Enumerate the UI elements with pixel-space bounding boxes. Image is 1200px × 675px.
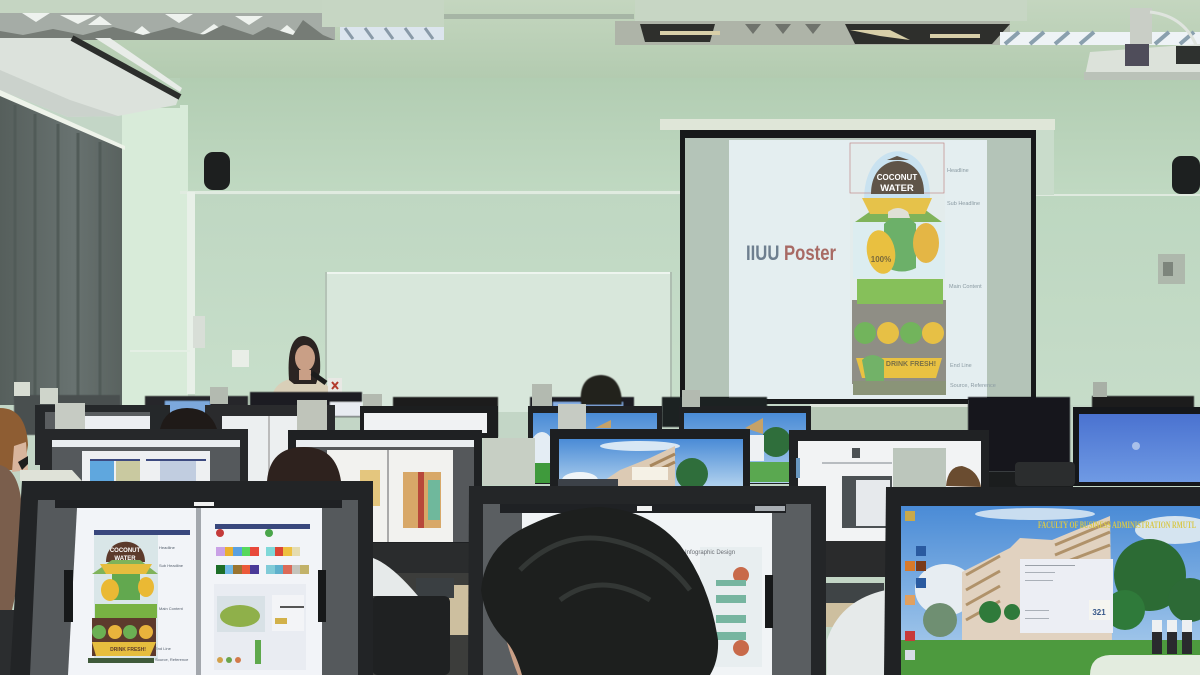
document left page: infographic: Source, Reference (155, 657, 189, 662)
text: document snippet: Infographic Design (685, 550, 735, 556)
poster example (850, 143, 946, 395)
whiteboard (325, 272, 672, 412)
monitor: row 3 left (40, 429, 248, 481)
slide labels: End Line (950, 363, 972, 369)
poster example: COCONUT (877, 173, 917, 182)
monitor: row 3 centre left (288, 430, 482, 558)
front left student hair (0, 465, 22, 675)
dark desks behind right monitors (989, 472, 1073, 490)
desktop wallpaper (901, 506, 1200, 675)
monitor: row 2 right (679, 406, 811, 484)
document left page: infographic: Main Content (159, 606, 184, 611)
grey paper stands (14, 382, 1107, 488)
poster example: 100% (871, 255, 891, 264)
slide title: IIUU Poster (746, 242, 836, 265)
document left page: infographic: WATER (114, 556, 136, 562)
document left page: infographic: Sub Headline (159, 563, 184, 568)
desktop icons (905, 511, 926, 660)
slide labels (947, 168, 996, 389)
projector (1084, 8, 1200, 80)
monitor: row 3 centre (550, 429, 750, 490)
monitor: row 2 far left (35, 405, 170, 465)
air conditioner (0, 38, 182, 117)
wall switch (193, 316, 249, 367)
front left monitor (10, 481, 373, 675)
seated student row 3 heads (20, 447, 981, 487)
front right monitor (884, 487, 1200, 675)
monitor: row 2 second (205, 405, 335, 481)
desk area (372, 541, 886, 675)
slide labels: Source, Reference (950, 383, 996, 389)
front student head (481, 507, 718, 675)
document right page: colour palettes (214, 524, 310, 670)
seated students row 2 heads (0, 408, 1075, 486)
monitor: row 3 right (789, 430, 989, 555)
poster example: WATER (880, 183, 914, 194)
monitor: row 2 centre (528, 406, 662, 484)
dialog window (1020, 559, 1113, 633)
front centre monitor (468, 486, 826, 675)
slide labels: Headline (947, 168, 969, 174)
screen ledge (680, 400, 968, 435)
projection screen (660, 119, 1055, 400)
dialog window: 321 (1092, 608, 1106, 617)
wall socket box (1158, 254, 1185, 284)
ceiling lights (0, 0, 1200, 45)
slide labels: Main Content (949, 284, 982, 290)
document left page: infographic: DRINK FRESH! (110, 647, 146, 653)
document left page: infographic: Headline (159, 545, 176, 550)
right speaker (1172, 156, 1200, 194)
presenter (272, 336, 342, 396)
monitor row 3 (14, 382, 1107, 558)
monitor: row 2 centre left (360, 406, 498, 438)
monitor: row 2 far right (1073, 407, 1200, 486)
monitor row 2 (35, 405, 1200, 486)
document left page: infographic: End Line (155, 646, 172, 651)
window curtain (0, 90, 125, 405)
left speaker (204, 152, 230, 190)
slide (729, 140, 996, 399)
document left page: infographic (88, 530, 190, 663)
back row monitors (14, 375, 1194, 472)
slide labels: Sub Headline (947, 201, 980, 207)
poster example: DRINK FRESH! (886, 361, 936, 368)
document left page: infographic: COCONUT (110, 548, 140, 554)
